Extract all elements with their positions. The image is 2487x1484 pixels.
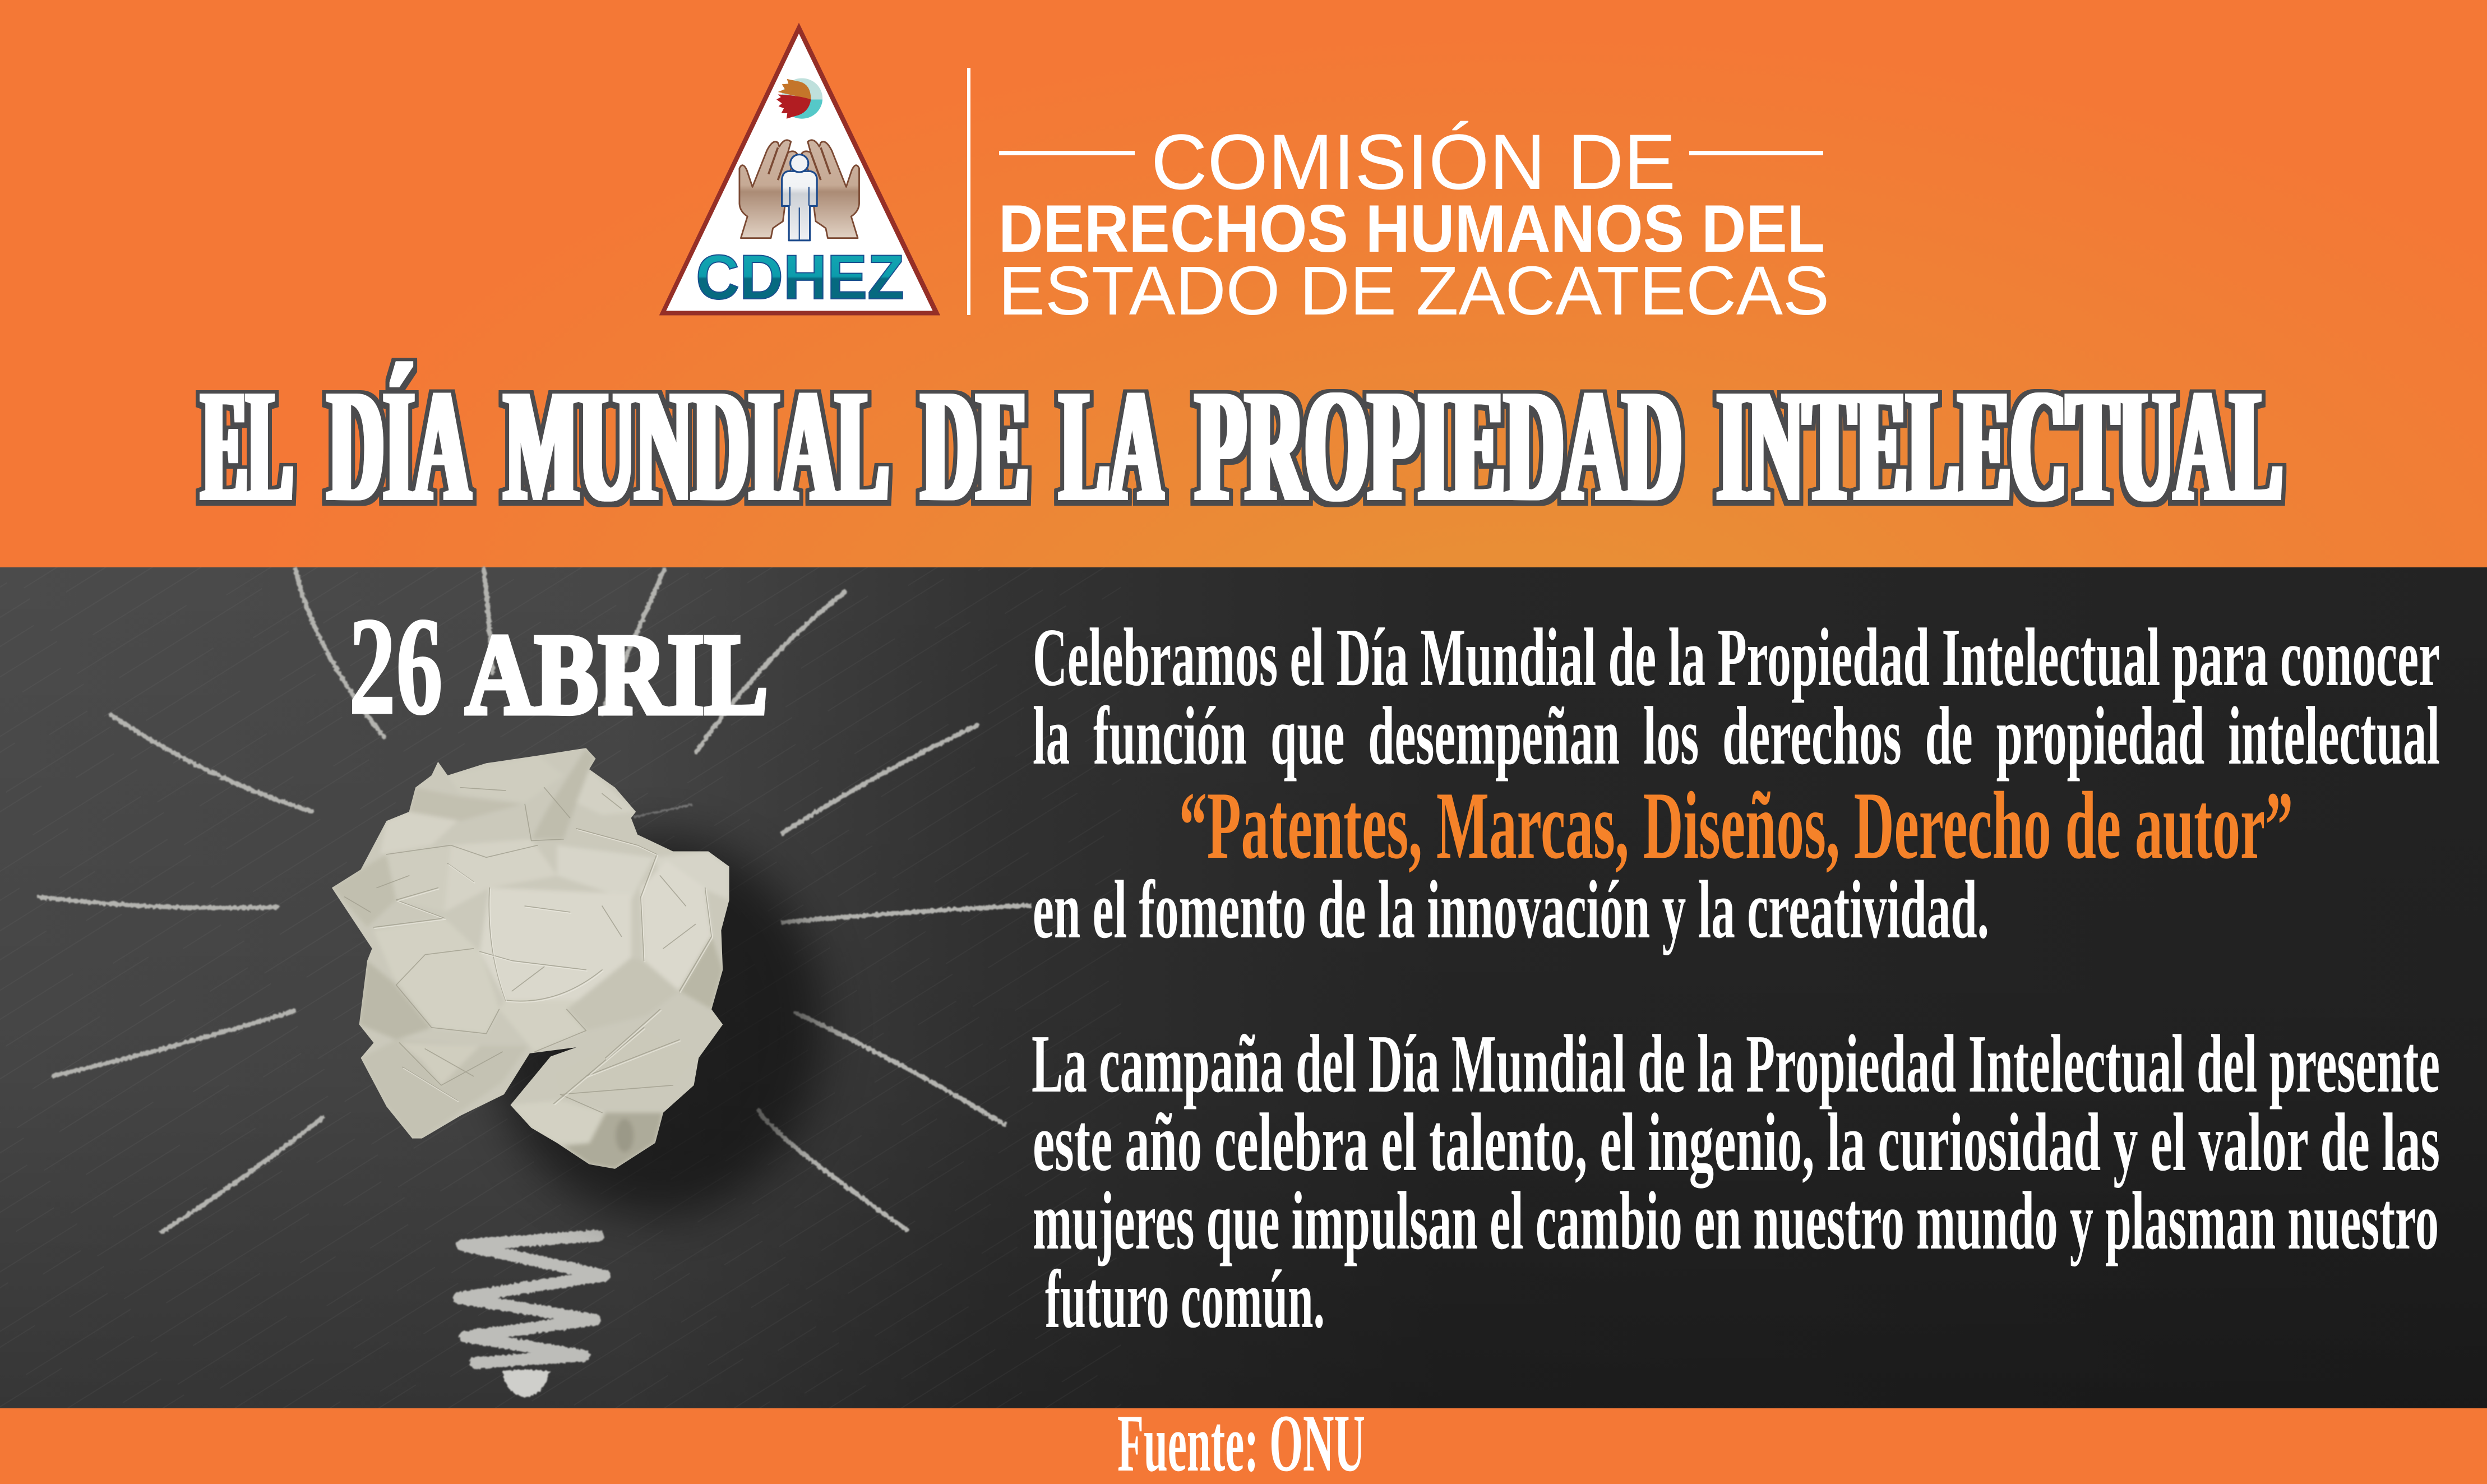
chalk rays <box>39 569 1029 1232</box>
title: PROPIEDAD <box>1196 358 1682 534</box>
divider <box>967 68 970 315</box>
icon: sun and moon <box>776 78 822 119</box>
organization name <box>999 118 1829 330</box>
illustration: crumpled paper light bulb <box>39 569 1029 1397</box>
triangle frame <box>659 23 940 315</box>
organization name: ESTADO DE ZACATECAS <box>999 253 1829 330</box>
date: 26 abril: 26 <box>349 589 443 744</box>
date: 26 abril: ABRIL <box>465 610 768 738</box>
footer band <box>0 1398 2487 1484</box>
title <box>202 358 2282 534</box>
chalk filament <box>459 1236 605 1397</box>
date: 26 abril <box>349 589 768 744</box>
title: DE <box>922 358 1028 534</box>
title: LA <box>1060 358 1162 534</box>
icon: hands <box>739 140 859 238</box>
organization name: COMISIÓN DE <box>1151 118 1676 206</box>
text block: first paragraph <box>1033 612 2440 956</box>
paper shadow <box>488 835 824 1217</box>
text block: second paragraph <box>1032 1018 2440 1346</box>
title: EL <box>202 358 293 534</box>
text block: second paragraph: futuro común. <box>1045 1254 1325 1346</box>
icon: person <box>782 155 817 241</box>
paper ball <box>332 748 729 1169</box>
title: DÍA <box>328 358 470 534</box>
organization name: DERECHOS HUMANOS DEL <box>999 191 1825 266</box>
title: MUNDIAL <box>505 358 889 534</box>
panel: chalkboard <box>0 567 2487 1408</box>
logo wordmark: CDHEZ <box>696 242 904 312</box>
orange header background <box>0 0 2487 567</box>
logo: CDHEZ triangle <box>659 23 940 315</box>
